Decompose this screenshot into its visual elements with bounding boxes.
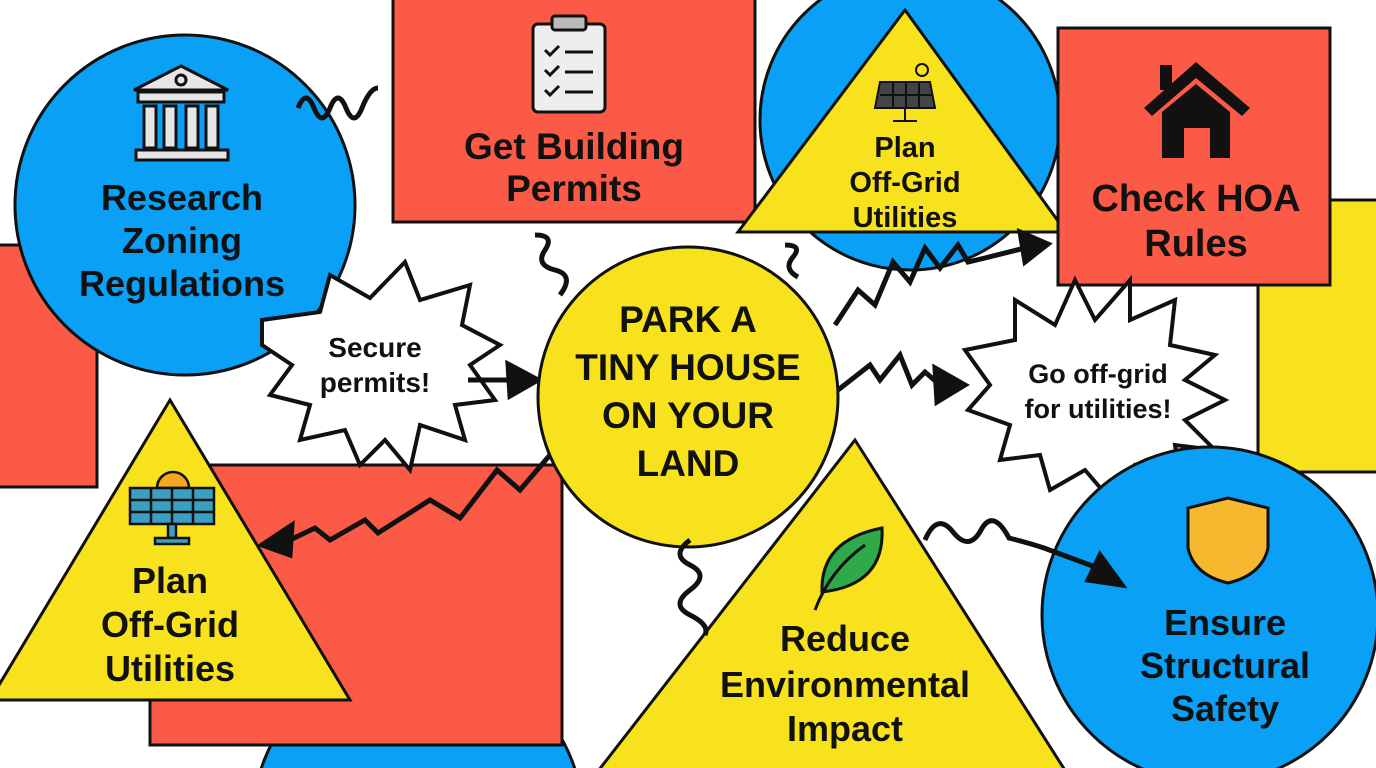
panel: check HOA rules (1058, 28, 1330, 285)
panel: central topic: LAND (637, 443, 739, 484)
panel: reduce environmental impact: Reduce (780, 618, 910, 659)
panel: plan off-grid top: Plan (874, 132, 936, 164)
callout: go off-grid (965, 280, 1225, 505)
callout: secure permits: Secure (328, 332, 422, 363)
panel: ensure structural safety (1042, 447, 1376, 768)
panel: central topic: TINY HOUSE (575, 347, 801, 388)
panel: ensure structural safety: Structural (1140, 645, 1310, 686)
arrow: squiggle top-left (298, 88, 378, 118)
arrow: to HOA (835, 232, 1048, 325)
panel: research zoning (15, 35, 355, 375)
panel: bottom red rect (150, 465, 562, 745)
icon: shield (1188, 498, 1268, 583)
panel: central topic: ON YOUR (602, 395, 774, 436)
arrow: squiggle to permits (535, 235, 566, 295)
panel: ensure structural safety: Safety (1171, 688, 1279, 729)
panel: plan off-grid bottom-left: Plan (132, 560, 208, 601)
panel: get building permits (393, 0, 755, 222)
panel: ensure structural safety: Ensure (1164, 602, 1286, 643)
callout: go off-grid: Go off-grid (1028, 359, 1168, 389)
icon: solar panel small (875, 64, 935, 121)
icon: clipboard (533, 16, 605, 112)
panel: get building permits: Permits (506, 168, 642, 209)
arrow: squiggle to bottom triangle (680, 540, 706, 635)
icon: house (1144, 62, 1250, 158)
panel: reduce environmental impact: Environmental (720, 664, 970, 705)
panel: plan off-grid bottom-left: Off-Grid (101, 604, 239, 645)
panel: check HOA rules: Check HOA (1091, 178, 1301, 220)
panel: research zoning: Research (101, 177, 263, 218)
panel: plan off-grid bottom-left: Utilities (105, 648, 235, 689)
background shape: bottom blue circle (253, 655, 583, 768)
panel: research zoning: Regulations (79, 263, 285, 304)
panel: plan off-grid top: Off-Grid (849, 167, 961, 199)
arrow: squiggle to top triangle (785, 245, 798, 277)
icon: leaf (822, 528, 882, 592)
arrow: to bottom-left triangle (262, 455, 550, 555)
panel: plan off-grid top (738, 0, 1066, 270)
panel: plan off-grid top: Utilities (853, 202, 957, 234)
panel: plan off-grid bottom-left (0, 400, 350, 700)
callout: go off-grid: for utilities! (1024, 394, 1172, 424)
callout: secure permits: permits! (320, 367, 430, 398)
background shape: right yellow rect (1258, 200, 1376, 472)
arrow: secure permits to center (468, 364, 538, 396)
arrow: to go off-grid callout (838, 355, 965, 402)
panel: reduce environmental impact (595, 440, 1068, 768)
panel: check HOA rules: Rules (1144, 223, 1248, 265)
icon: bank (134, 66, 228, 160)
panel: research zoning: Zoning (122, 220, 242, 261)
background shape: left red rect (0, 245, 97, 487)
panel: central topic: PARK A (619, 299, 757, 340)
panel: central topic (538, 247, 838, 547)
panel: get building permits: Get Building (464, 126, 684, 167)
panel: reduce environmental impact: Impact (787, 708, 903, 749)
callout: secure permits (262, 262, 500, 470)
arrow: to safety (925, 521, 1122, 585)
icon: solar panel (130, 472, 214, 544)
